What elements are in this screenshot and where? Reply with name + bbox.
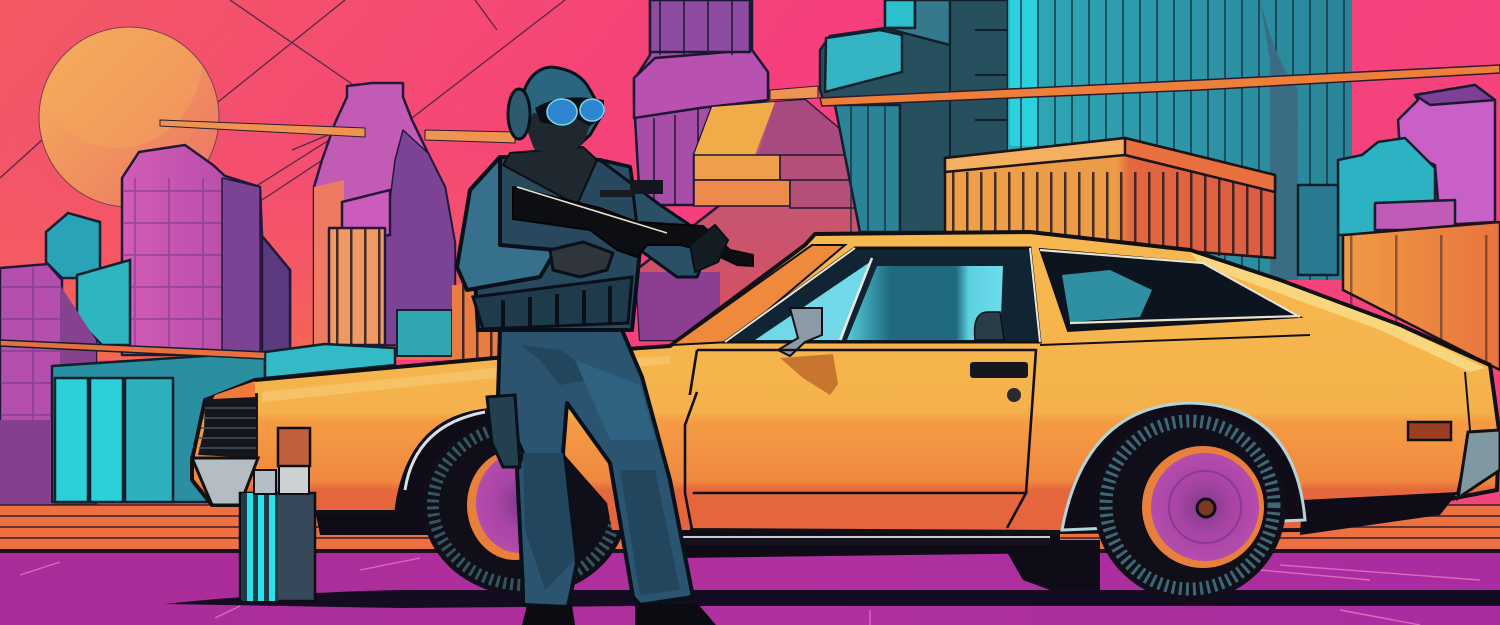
sun (38, 26, 220, 208)
sky streak right (820, 65, 1500, 106)
holster (487, 395, 520, 467)
wheel: rear (1094, 409, 1286, 601)
wheel: front (422, 414, 628, 596)
roof highlight (1190, 252, 1485, 372)
side windows frame (725, 248, 1040, 342)
front corner light (213, 381, 255, 399)
rear seam (1457, 372, 1470, 495)
tower: central purple spire (314, 83, 455, 345)
canister (240, 428, 315, 601)
block: orange far right (1343, 222, 1500, 370)
rifle (513, 180, 753, 266)
far side tire (1000, 540, 1100, 590)
ground sparkle lines (20, 558, 1480, 625)
windshield orange triangle (672, 245, 845, 345)
belt line (1040, 335, 1310, 345)
rear arch (1062, 403, 1305, 530)
underbody (315, 510, 1060, 558)
hood highlight (262, 356, 670, 402)
leg shading (520, 345, 680, 595)
boots (522, 604, 716, 625)
orange stripes (0, 505, 1500, 553)
car body (192, 232, 1499, 532)
tower: pink tower behind sun (122, 145, 290, 355)
rear bumper (1458, 430, 1500, 498)
lower left teal buildings (0, 340, 395, 502)
head (508, 67, 604, 155)
torso (470, 157, 640, 330)
right arm (600, 160, 712, 277)
mirror shadow (780, 354, 838, 395)
tower: top purple center (634, 0, 768, 205)
tower: teal small (46, 213, 130, 345)
glove right (690, 225, 728, 272)
left arm (457, 157, 556, 290)
door lines (685, 350, 1036, 530)
pillar strip (840, 258, 872, 340)
sky streak left (160, 86, 818, 143)
block: orange low block (452, 285, 500, 360)
ground (0, 553, 1500, 625)
sky warm lower glow (0, 120, 520, 360)
rear window chrome (1040, 250, 1300, 323)
mirror (778, 308, 822, 356)
rear side marker (1408, 422, 1451, 440)
tower: far left pink (0, 264, 96, 505)
quarter glass (755, 262, 870, 340)
door lower left seam (685, 392, 697, 530)
figure (457, 67, 753, 625)
door lock (1007, 388, 1021, 402)
glove (550, 242, 613, 277)
legs (498, 330, 693, 607)
rear window (1040, 249, 1300, 331)
car shadow (165, 590, 1500, 608)
tower: teal right block (820, 0, 1008, 232)
vest pouches (473, 277, 632, 329)
left skyline (0, 83, 500, 505)
front wheel well (394, 408, 560, 514)
front arch chrome (405, 412, 485, 490)
car (192, 232, 1500, 601)
door handle (970, 362, 1028, 378)
seat (975, 312, 1004, 340)
window chrome edge (725, 248, 1040, 342)
block: orange crate (945, 138, 1275, 258)
rear underbody (1300, 492, 1458, 535)
body between legs (556, 395, 700, 530)
tower: small teal right (1298, 138, 1455, 275)
scarf (503, 147, 597, 205)
front grille (198, 393, 258, 458)
front bumper (192, 458, 258, 505)
tower: purple far right (1398, 85, 1495, 225)
tower: orange stepped (636, 100, 868, 340)
tower: big teal right (1008, 0, 1352, 280)
leg highlight (575, 360, 655, 440)
chrome sill (680, 535, 1050, 545)
rear window glass (1062, 270, 1152, 322)
door glass (847, 266, 1003, 340)
block: teal low block (397, 310, 452, 356)
sky crack lines (0, 0, 565, 200)
